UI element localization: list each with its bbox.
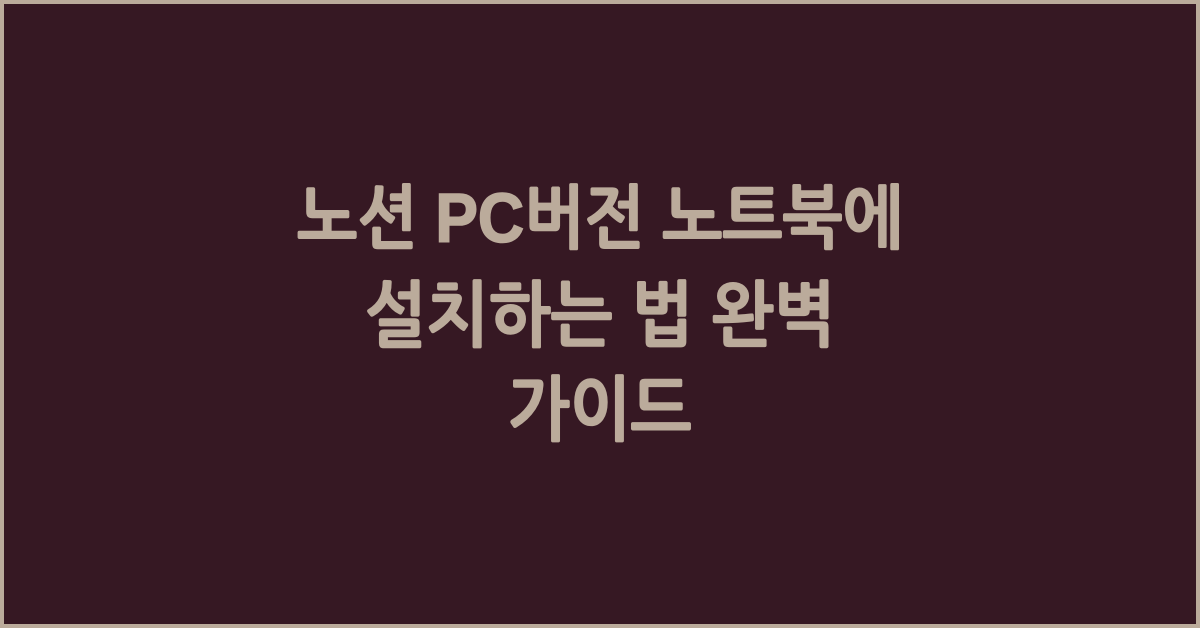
title: 가이드 bbox=[508, 370, 692, 449]
title: 설치하는 법 완벽 bbox=[365, 275, 835, 355]
title: 노션 PC버전 노트북에 bbox=[297, 179, 903, 257]
